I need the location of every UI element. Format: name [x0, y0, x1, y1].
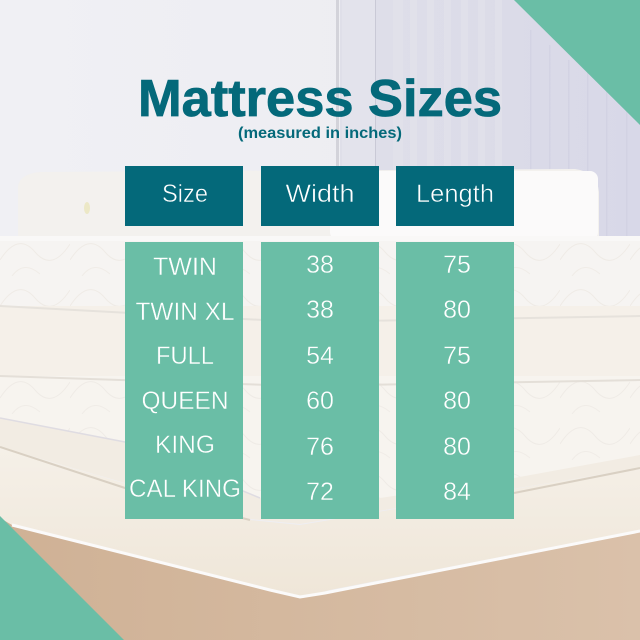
length rows: 80: [443, 433, 471, 461]
header: size: Size: [162, 180, 208, 208]
header: length: Length: [416, 180, 494, 208]
width rows: 38: [306, 296, 334, 324]
header: width: Width: [286, 180, 354, 208]
subtitle: (measured in inches): [238, 125, 402, 142]
width rows: 60: [306, 387, 334, 415]
mattress base: [0, 447, 640, 598]
width rows: 54: [306, 342, 334, 370]
header: size: [125, 166, 243, 226]
size rows: KING: [155, 431, 215, 459]
table column: width: [261, 166, 379, 519]
width rows: 72: [306, 478, 334, 506]
decorative triangle: top right: [514, 0, 640, 125]
size rows: QUEEN: [142, 387, 228, 415]
floor: [0, 510, 640, 640]
table column: size: [125, 166, 243, 519]
length rows: 80: [443, 387, 471, 415]
window blinds: [336, 0, 640, 250]
size rows: TWIN XL: [136, 298, 235, 326]
header: length: [396, 166, 514, 226]
width rows: 38: [306, 251, 334, 279]
width rows: [261, 242, 379, 519]
header: width: [261, 166, 379, 226]
length rows: 75: [443, 251, 471, 279]
size rows: CAL KING: [129, 475, 241, 503]
length rows: [396, 242, 514, 519]
width rows: 76: [306, 433, 334, 461]
stacked mattresses: [0, 238, 640, 310]
table column: length: [396, 166, 514, 519]
length rows: 75: [443, 342, 471, 370]
length rows: 80: [443, 296, 471, 324]
size rows: [125, 242, 243, 519]
size rows: FULL: [156, 342, 214, 370]
title: Mattress Sizes: [138, 70, 502, 128]
decorative triangle: bottom left: [0, 516, 124, 640]
size rows: TWIN: [153, 253, 217, 281]
top mattress: [18, 169, 599, 240]
length rows: 84: [443, 478, 471, 506]
